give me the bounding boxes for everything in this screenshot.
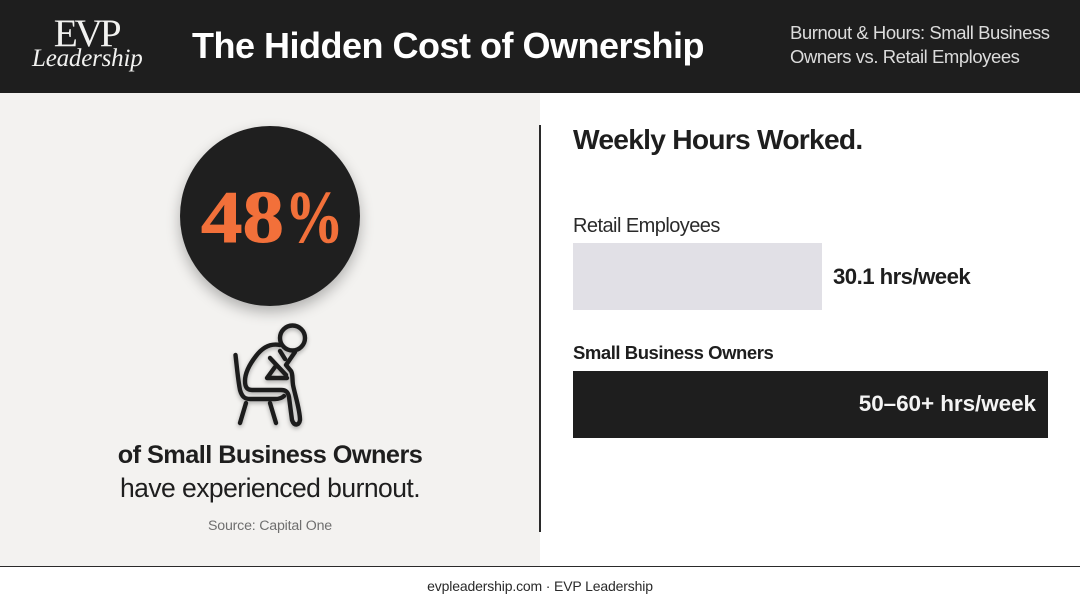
footer: [0, 566, 1080, 603]
bar: retail employees: [573, 243, 822, 310]
panel: weekly hours chart: [541, 93, 1080, 566]
logo: EVP Leadership: Leadership: [32, 45, 143, 72]
subtitle: Burnout & Hours: Small Business: [790, 22, 1050, 43]
icon: burned-out person on chair: [231, 323, 310, 431]
panel: burnout statistic: [0, 93, 540, 566]
source note: Source: Capital One: [208, 518, 332, 534]
bar: small business owners: [573, 371, 1048, 438]
panel divider: [539, 125, 541, 532]
logo: EVP Leadership: [32, 11, 143, 72]
chart heading: Weekly Hours Worked.: [573, 123, 862, 155]
stat value: 48: 48: [201, 177, 284, 259]
bar label: retail employees: Retail Employees: [573, 215, 720, 237]
caption: stat description: [118, 441, 422, 503]
logo: EVP Leadership: EVP: [54, 11, 118, 55]
value: retail employees: 30.1 hrs/week: [833, 264, 970, 289]
header band: [0, 0, 1080, 93]
stat value: percent sign: %: [285, 177, 343, 259]
value: small business owners: 50–60+ hrs/week: [859, 391, 1036, 416]
bar label: small business owners: Small Business Owners: [573, 342, 773, 363]
footer text: evpleadership.com · EVP Leadership: [427, 578, 653, 594]
title: The Hidden Cost of Ownership: [192, 25, 704, 66]
subtitle: Owners vs. Retail Employees: [790, 46, 1019, 67]
caption bold line: of Small Business Owners: [118, 441, 422, 469]
caption regular line: have experienced burnout.: [120, 473, 420, 503]
subtitle: [790, 22, 1050, 67]
stat circle: 48%: [180, 126, 360, 306]
